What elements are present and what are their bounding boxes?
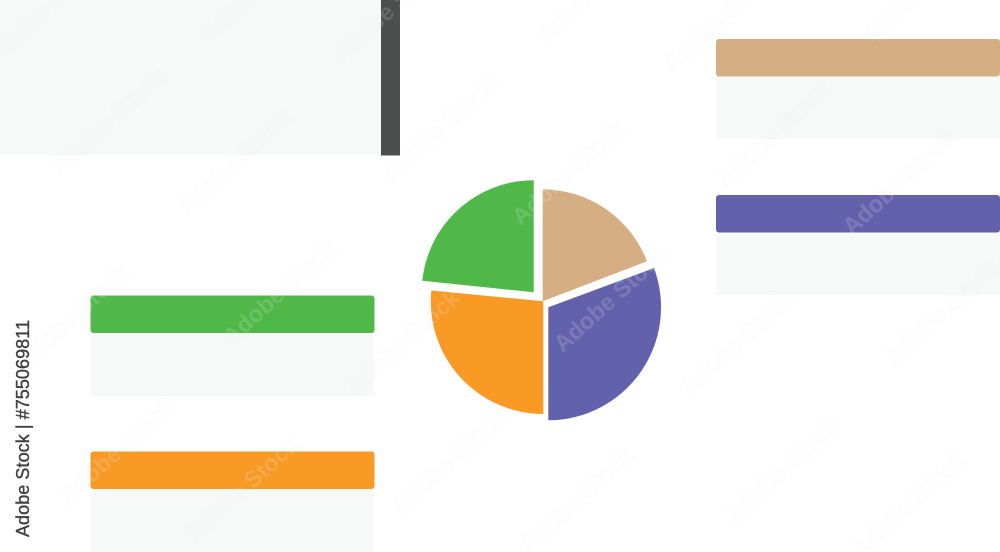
watermark pattern: Adobe Stock <box>720 413 844 529</box>
watermark pattern: Adobe Stock <box>838 124 962 240</box>
panel: tan card <box>716 39 1000 139</box>
watermark pattern: Adobe Stock <box>47 63 171 179</box>
watermark pattern: Adobe Stock <box>173 104 297 220</box>
panel: green card <box>90 296 374 396</box>
watermark pattern: Adobe Stock <box>387 403 511 519</box>
panel: purple card <box>716 195 1000 295</box>
watermark pattern: Adobe Stock <box>378 70 502 186</box>
pie slice: tan <box>543 189 647 301</box>
pie slice: green <box>422 180 534 292</box>
panel: top-left blank text block with dark bar <box>0 0 400 156</box>
watermark pattern: Adobe Stock <box>180 431 304 547</box>
watermark pattern: Adobe Stock <box>507 114 631 230</box>
pie slice: purple <box>548 268 661 420</box>
watermark pattern: Adobe Stock <box>676 284 800 400</box>
watermark pattern: Adobe Stock <box>880 254 1000 370</box>
pie slice: orange <box>431 290 543 414</box>
watermark pattern: Adobe Stock <box>712 76 836 192</box>
watermark pattern: Adobe Stock <box>341 284 465 400</box>
watermark pattern: Adobe Stock <box>549 241 673 357</box>
watermark pattern: Adobe Stock <box>11 258 135 374</box>
watermark pattern: Adobe Stock <box>55 393 179 509</box>
stock id label: Adobe Stock | #755069811 <box>13 320 33 537</box>
panel: orange card <box>90 452 374 552</box>
pie chart <box>422 180 661 420</box>
watermark pattern: Adobe Stock <box>218 234 342 350</box>
